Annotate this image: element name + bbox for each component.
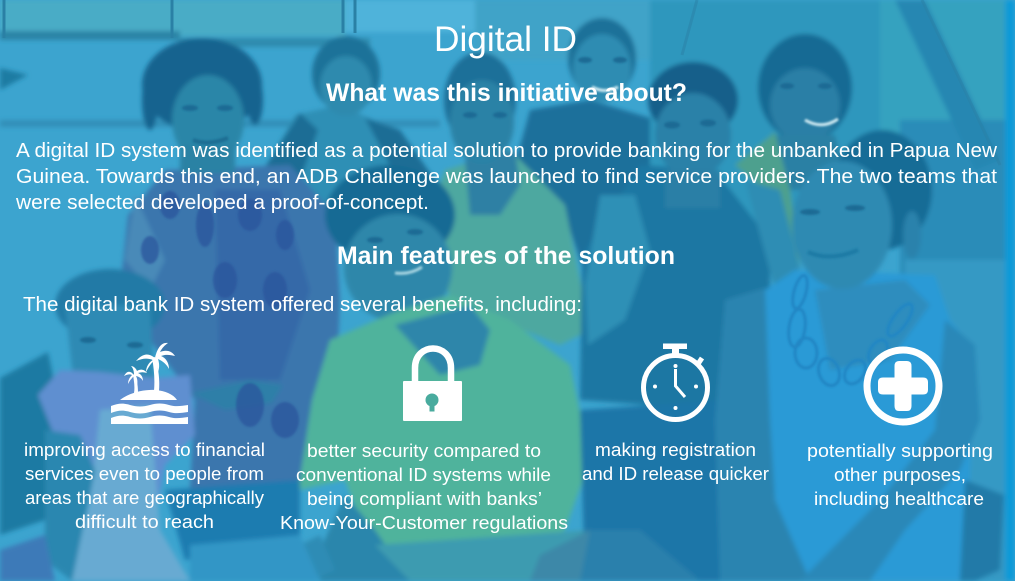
- caption: quicker registration: and ID release quicker: [582, 463, 769, 484]
- caption: security: [280, 440, 568, 533]
- dress pattern: [141, 191, 299, 438]
- intro paragraph: Guinea. Towards this end, an ADB Challenge was launched to find service providers. The two teams that: [16, 165, 997, 188]
- caption: financial access: services even to people from: [25, 463, 264, 484]
- back man: [250, 105, 440, 230]
- caption: quicker registration: [582, 439, 769, 484]
- back woman: [515, 100, 650, 290]
- center man: [430, 150, 590, 345]
- center girl: [580, 165, 770, 410]
- icon: medical cross in circle: [867, 350, 939, 422]
- caption: financial access: areas that are geographically: [25, 487, 265, 508]
- right woman: [758, 34, 852, 142]
- caption: financial access: difficult to reach: [75, 511, 214, 532]
- icon: palm island and waves: [111, 343, 188, 424]
- caption: financial access: [24, 439, 265, 532]
- icon: stopwatch: [644, 344, 708, 420]
- necklace loops: [786, 274, 917, 389]
- caption: quicker registration: making registration: [595, 439, 756, 460]
- lead-in sentence: The digital bank ID system offered several benefits, including:: [23, 293, 582, 316]
- front man: [325, 165, 455, 265]
- front woman: [755, 270, 975, 581]
- intro paragraph: were selected developed a proof-of-concept.: [15, 191, 429, 214]
- heading: what was this initiative about: What was this initiative about?: [326, 79, 687, 107]
- heading: main features of the solution: Main features of the solution: [337, 242, 675, 270]
- scenery: [0, 0, 345, 36]
- girl: [0, 352, 60, 535]
- caption: security: Know-Your-Customer regulations: [280, 512, 568, 533]
- title: Digital ID: [434, 20, 577, 59]
- caption: other purposes: [807, 440, 993, 509]
- intro paragraph: A digital ID system was identified as a potential solution to provide banking for the unbanked in Papua New: [16, 139, 997, 162]
- caption: security: being compliant with banks’: [307, 488, 542, 509]
- caption: security: better security compared to: [307, 440, 541, 461]
- floor and shorts: [165, 480, 300, 560]
- facial features: [80, 57, 865, 348]
- left woman dress: [120, 165, 340, 490]
- intro paragraph: [15, 139, 997, 214]
- caption: other purposes: potentially supporting: [807, 440, 993, 461]
- caption: financial access: improving access to financial: [24, 439, 265, 460]
- caption: other purposes: including healthcare: [814, 488, 984, 509]
- caption: security: conventional ID systems while: [296, 464, 551, 485]
- icon: padlock: [403, 348, 462, 421]
- fence posts: [4, 0, 1000, 165]
- caption: other purposes: other purposes,: [834, 464, 966, 485]
